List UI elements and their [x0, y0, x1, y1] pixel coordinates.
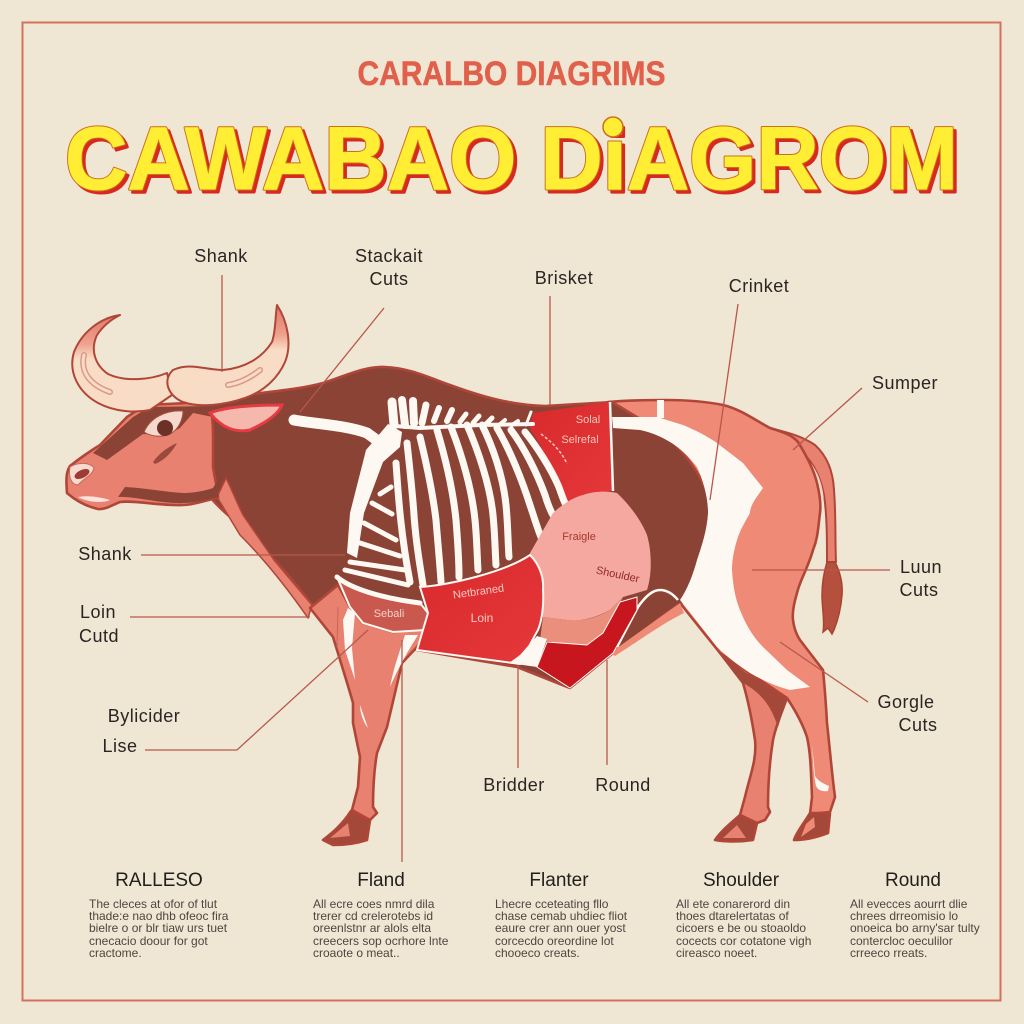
scapula — [294, 420, 382, 444]
callout: Luun Cuts: Luun — [900, 557, 942, 577]
main title: CAWABAO DiAGROM — [68, 111, 961, 211]
left horn inner mark — [83, 355, 110, 392]
column: Fland: creecers sop ocrhore lnte — [313, 934, 449, 948]
dotted mark — [541, 434, 567, 464]
short ribs — [337, 487, 420, 603]
column: Round — [850, 870, 980, 960]
column: Round: All evecces aourrt dlie — [850, 897, 968, 911]
neck strip — [217, 478, 312, 618]
column: Round: crreeco rreats. — [850, 946, 927, 960]
column: Fland: croaote o meat.. — [313, 946, 400, 960]
callout: Stackait Cuts: Cuts — [369, 269, 409, 289]
head — [66, 402, 220, 509]
cut labels: Fraigle — [562, 531, 596, 543]
pink cut — [530, 492, 651, 621]
hip white band — [612, 417, 810, 690]
front hoof interior — [330, 823, 350, 838]
column: Shoulder: cicoers e be ou stoaoldo — [676, 921, 806, 935]
column: Ralleso: cnecacio doour for got — [89, 934, 208, 948]
red loin cut — [417, 555, 543, 664]
red upper cut — [530, 402, 613, 505]
column: Flanter: chase cemab uhdiec fliot — [495, 909, 628, 923]
column: Round: chrees drreomisio lo — [850, 909, 958, 923]
column: Flanter: Lhecre cceteating fllo — [495, 897, 609, 911]
callout: Gorgle Cuts: Cuts — [898, 715, 938, 735]
column: Ralleso: RALLESO — [115, 870, 203, 891]
callout: Luun Cuts — [752, 557, 942, 600]
front leg seam — [337, 607, 338, 647]
column: Round: Round — [885, 870, 941, 891]
nostril — [73, 467, 91, 481]
cut labels — [374, 414, 641, 625]
nose — [69, 463, 94, 485]
near hoof interior — [801, 817, 815, 837]
far hind leg — [720, 653, 787, 823]
column: Ralleso: The cleces at ofor of tlut — [89, 897, 218, 911]
belly skin strip — [610, 603, 684, 656]
column: Fland: Fland — [357, 870, 405, 891]
column: Shoulder: thoes dtarelertatas of — [676, 909, 789, 923]
white patch — [509, 636, 547, 667]
callout: Round — [595, 660, 651, 795]
column: Shoulder: cireasco noeet. — [676, 946, 757, 960]
jaw shadow — [118, 476, 220, 503]
cut labels: Solal — [576, 414, 600, 426]
callout: Bridder: Bridder — [483, 775, 545, 795]
column: Shoulder — [676, 870, 811, 960]
cheek mark — [153, 443, 177, 464]
belly white line — [617, 590, 678, 647]
head shape — [66, 402, 218, 509]
callout: Stackait Cuts: Stackait — [355, 246, 423, 266]
cut labels: Loin — [471, 611, 493, 625]
callout: Shank top — [194, 246, 248, 372]
column: Round: onoeica bo arny'sar tulty — [850, 921, 980, 935]
column: Shoulder: All ete conarerord din — [676, 897, 790, 911]
callout: Stackait Cuts — [300, 246, 423, 412]
column: Flanter: corcecdo oreordine lot — [495, 934, 614, 948]
column: Fland: trerer cd crelerotebs id — [313, 909, 433, 923]
front leg bones — [343, 608, 418, 728]
callout: Loin Cutd — [79, 602, 310, 646]
callout: Crinket: Crinket — [729, 276, 789, 296]
callout: Crinket — [710, 276, 789, 500]
far leg shadow — [720, 653, 787, 727]
callout: Loin Cutd: Loin — [80, 602, 116, 622]
lip — [78, 496, 110, 502]
callout: Bridder — [483, 665, 545, 795]
column: Fland: All ecre coes nmrd dila — [313, 897, 435, 911]
callout: Brisket: Brisket — [535, 268, 593, 288]
callout: Bylicider Lise — [102, 630, 368, 756]
cut labels: Shoulder — [595, 565, 641, 586]
forehead patch — [93, 406, 213, 460]
cut labels: Selrefal — [561, 434, 599, 446]
left horn — [72, 315, 172, 412]
cut labels: Sebali — [374, 608, 404, 620]
far hoof interior — [723, 825, 746, 838]
callout: Gorgle Cuts: Gorgle — [877, 692, 935, 712]
column: Ralleso — [89, 870, 229, 960]
body — [205, 367, 712, 688]
eye — [144, 411, 183, 436]
spine vertebrae — [392, 400, 533, 428]
callout: Shank left: Shank — [78, 544, 132, 564]
callout: Round: Round — [595, 775, 651, 795]
white upper cut edge — [610, 402, 613, 491]
column: Shoulder: Shoulder — [703, 870, 780, 891]
callout: Luun Cuts: Cuts — [899, 580, 939, 600]
column: Fland — [313, 870, 449, 960]
column: Shoulder: cocects cor cotatone vigh — [676, 934, 811, 948]
column: Ralleso: bielre o or blr tiaw urs tuet — [89, 921, 228, 935]
callout: Sumper: Sumper — [872, 373, 938, 393]
column: Fland: oreenlstnr ar alols elta — [313, 921, 431, 935]
callout line: Fland — [401, 640, 403, 862]
buffalo cutaway illustration — [66, 305, 842, 845]
salmon lower cut — [540, 597, 623, 645]
column: Ralleso: thade:e nao dhb ofeoc fira — [89, 909, 229, 923]
sternum column — [396, 463, 410, 582]
cut labels: Netbraned — [452, 583, 505, 602]
callout: Shank top: Shank — [194, 246, 248, 266]
callout: Sumper — [793, 373, 938, 450]
ribcage — [294, 400, 566, 603]
column: Flanter — [495, 870, 628, 960]
tail tuft — [822, 562, 842, 634]
main title: CAWABAO DiAGROM — [65, 108, 958, 208]
column: Flanter: Flanter — [529, 870, 589, 891]
column: Ralleso: cractome. — [89, 946, 142, 960]
right horn — [167, 305, 288, 405]
rump and near hind leg — [608, 400, 835, 814]
shoulder cut — [337, 577, 428, 632]
front hoof — [323, 811, 370, 845]
tail — [770, 428, 836, 562]
callout: Loin Cutd: Cutd — [79, 626, 119, 646]
pupil — [157, 420, 173, 436]
near hind hoof — [794, 813, 830, 840]
hind leg highlight — [812, 744, 829, 791]
scapula blade — [347, 424, 402, 558]
near front leg — [310, 585, 430, 820]
main title: CAWABAO DiAGROM — [65, 108, 958, 208]
callout: Brisket — [535, 268, 593, 405]
tail pale line — [803, 455, 823, 498]
top rump stripe tick — [657, 400, 664, 418]
dark red round cut — [537, 597, 637, 688]
callout: Bylicider Lise: Lise — [102, 736, 138, 756]
right horn inner mark — [228, 370, 260, 385]
callout: Bylicider Lise: Bylicider — [108, 706, 180, 726]
ear — [210, 405, 282, 431]
subtitle: CARALBO DIAGRIMS — [358, 55, 666, 93]
column: Flanter: eaure crer ann ouer yost — [495, 921, 626, 935]
callout: Gorgle Cuts — [780, 642, 938, 735]
column: Flanter: chooeco creats. — [495, 946, 580, 960]
long ribs — [407, 425, 566, 585]
column: Round: contercloc oeculilor — [850, 934, 953, 948]
far hind hoof — [715, 815, 757, 842]
